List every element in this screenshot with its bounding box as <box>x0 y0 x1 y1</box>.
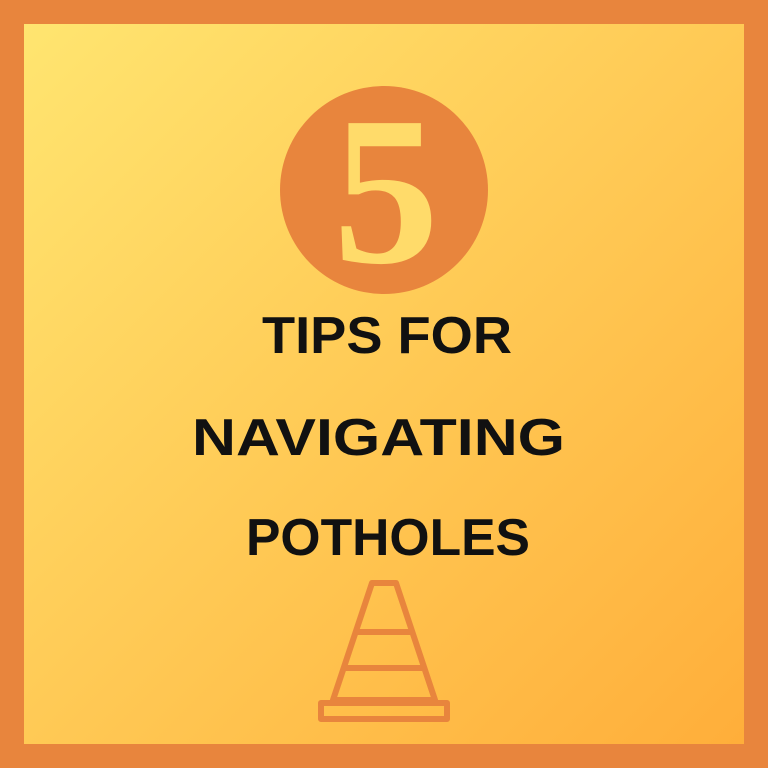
number badge: 5: 5 <box>333 73 439 308</box>
title: POTHOLES <box>246 509 530 567</box>
icon: traffic cone <box>321 583 447 719</box>
title: TIPS FOR <box>262 307 512 365</box>
title <box>192 307 565 567</box>
title: NAVIGATING <box>192 409 565 467</box>
number badge: 5 <box>280 73 488 308</box>
